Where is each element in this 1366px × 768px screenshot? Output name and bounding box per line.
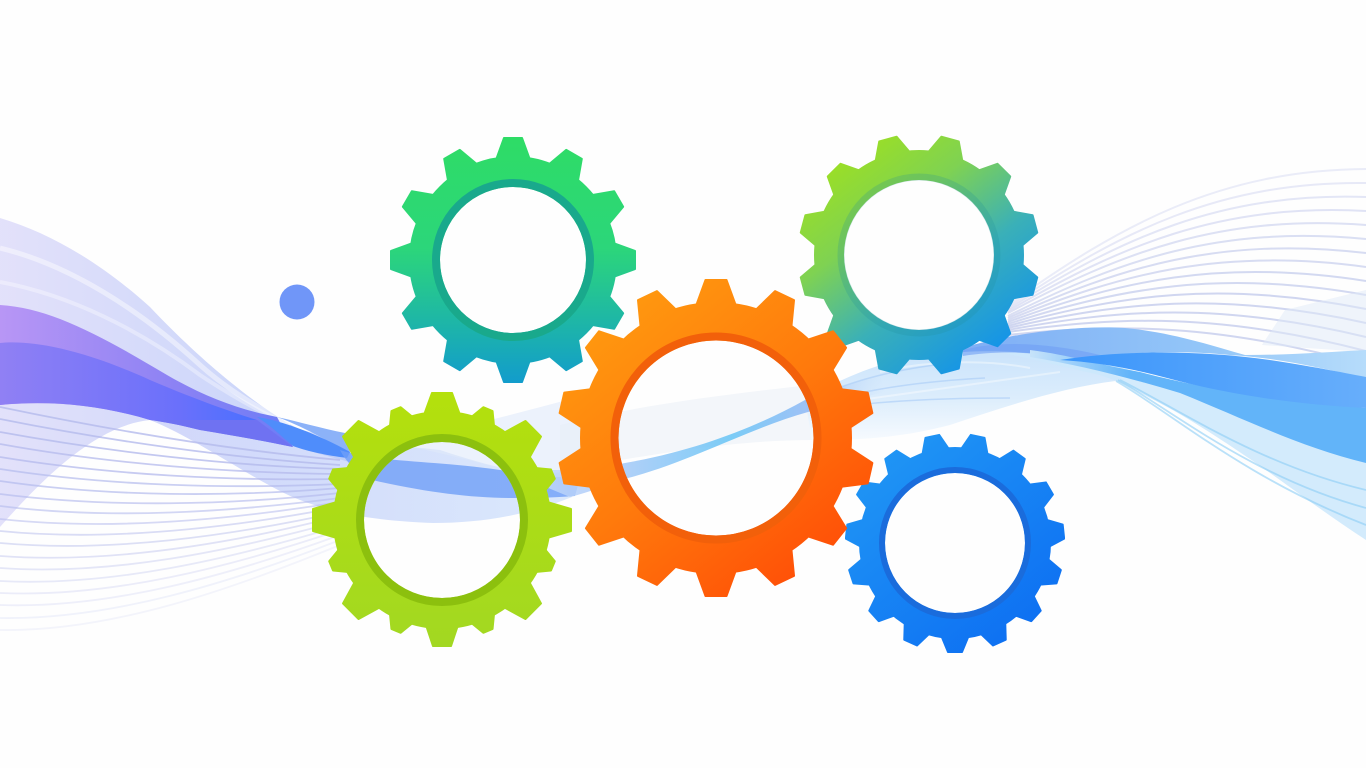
gear: centre orange — [557, 279, 875, 597]
right line fan — [1008, 169, 1366, 365]
right ribbons — [963, 327, 1366, 540]
gear: bottom left lime — [311, 389, 573, 651]
left line fan — [0, 407, 340, 630]
gear: top right lime to blue — [798, 134, 1040, 376]
faint band in centre — [560, 385, 815, 470]
left purple ribbon — [0, 305, 350, 458]
pale ribbon right of centre — [805, 346, 1125, 440]
ribbon through lime gear — [340, 385, 620, 498]
gear: top left green — [390, 137, 636, 383]
blue dot — [280, 284, 314, 320]
gear: bottom right blue — [845, 433, 1065, 653]
faint panel behind right lines — [1262, 290, 1366, 352]
central thin ribbon — [500, 375, 885, 497]
left lavender ribbon — [0, 218, 575, 527]
